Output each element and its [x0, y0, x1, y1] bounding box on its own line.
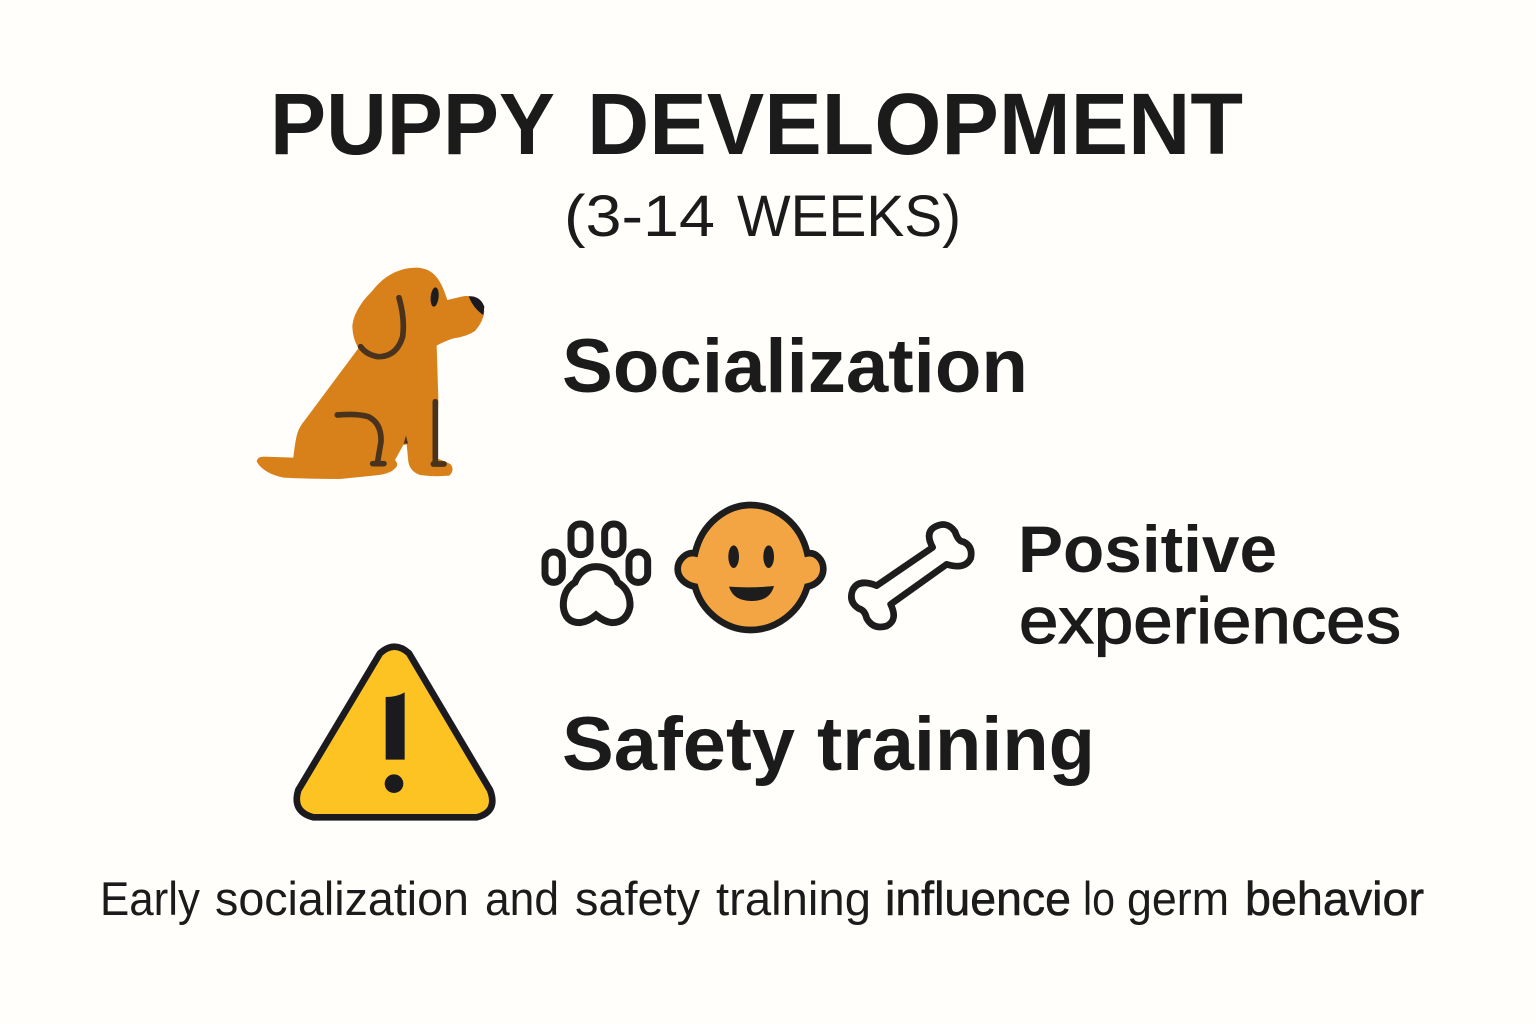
subtitle: [564, 184, 961, 249]
mouth: [729, 586, 774, 601]
text: Positive: Positive: [1018, 512, 1277, 586]
icon: sitting puppy: [257, 268, 484, 479]
footer caption: [100, 872, 1424, 925]
heading: Safety training: [562, 702, 1095, 787]
heading: Safety training: training: [817, 702, 1095, 787]
title: PUPPY: [270, 76, 555, 173]
footer caption: and: [485, 872, 559, 925]
heading: Safety training: Safety: [562, 702, 795, 787]
footer caption: lo: [1083, 872, 1115, 925]
puppy toe mark: [404, 436, 408, 444]
exclamation bar: [386, 692, 405, 760]
icon: bone: [851, 525, 971, 627]
puppy nose: [469, 296, 484, 315]
title: DEVELOPMENT: [587, 76, 1243, 173]
heading: Socialization: Socialization: [562, 324, 1028, 409]
subtitle: (3-14: [564, 184, 715, 249]
icon: warning triangle: [297, 647, 492, 817]
footer caption: tralning: [716, 872, 871, 925]
puppy ear line: [361, 298, 403, 357]
icon: smiling baby face: [678, 505, 823, 630]
title: [270, 76, 1243, 173]
footer caption: behavior: [1245, 872, 1424, 925]
puppy eye: [430, 287, 440, 307]
footer caption: Early: [100, 872, 200, 925]
footer caption: germ: [1127, 872, 1229, 925]
footer caption: socialization: [215, 872, 469, 925]
text: experiences: experiences: [1019, 584, 1401, 657]
puppy hind leg line: [337, 414, 384, 464]
footer caption: influence: [885, 872, 1071, 925]
exclamation dot: [385, 774, 403, 793]
puppy front leg line: [433, 402, 444, 464]
left eye: [728, 545, 739, 568]
footer caption: safety: [575, 872, 700, 925]
icon: paw print: [545, 524, 648, 623]
subtitle: WEEKS): [737, 184, 961, 249]
right eye: [763, 545, 774, 568]
